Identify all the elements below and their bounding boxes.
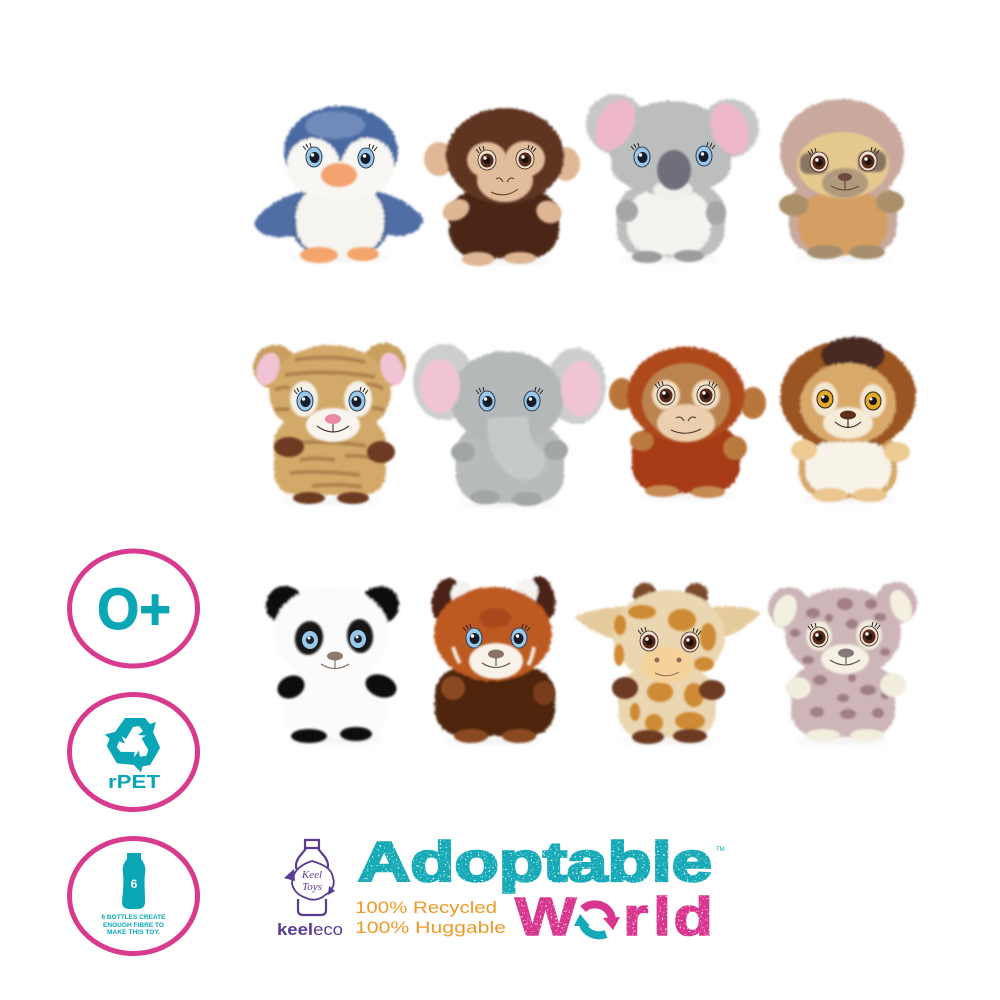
toy: giraffe [574, 583, 760, 744]
logo: keeleco bottle [277, 840, 343, 939]
badge: age 0+: O+ [97, 577, 171, 642]
logo: World wordmark: l [653, 886, 671, 947]
toy: penguin [254, 106, 423, 263]
badge: six bottles: ENOUGH FIBRE TO [103, 923, 164, 929]
tagline: 100% Recycled [355, 898, 497, 917]
badge: six bottles: 6 [131, 877, 138, 891]
badge: six bottles [70, 838, 198, 954]
logo: World wordmark: W [515, 886, 577, 947]
badge: age 0+ [70, 551, 198, 666]
tagline [355, 898, 506, 937]
toy: panda [266, 586, 400, 743]
badge: rPET recycling [70, 694, 198, 810]
logo: keeleco bottle: keeleco [277, 920, 343, 939]
badge: rPET recycling: rPET [108, 772, 160, 792]
toy: monkey [424, 108, 580, 266]
toy: lion [780, 337, 916, 502]
toy: elephant [413, 344, 606, 507]
icon: bottle [122, 853, 145, 909]
toy: red panda [428, 574, 559, 744]
logo: World wordmark [515, 886, 713, 947]
logo: World wordmark: d [673, 886, 713, 947]
badge: six bottles: MAKE THIS TOY. [107, 930, 160, 936]
toy: snow leopard [768, 582, 917, 744]
logo: Adoptable wordmark: Adoptable [358, 830, 712, 893]
tagline: 100% Huggable [355, 918, 506, 937]
toy: orangutan [609, 347, 766, 499]
toy: sloth [779, 99, 904, 261]
icon: recycling o [574, 904, 620, 935]
toy: tiger [252, 343, 408, 504]
logo: World wordmark: r [623, 886, 648, 947]
logo: Adoptable wordmark: TM [716, 847, 725, 853]
logo: keeleco bottle: Keel [301, 869, 322, 881]
toy: koala [586, 93, 759, 263]
icon: recycling arrows [101, 718, 165, 775]
logo: keeleco bottle: Toys [302, 881, 322, 893]
badge: six bottles: 6 BOTTLES CREATE [102, 915, 166, 921]
